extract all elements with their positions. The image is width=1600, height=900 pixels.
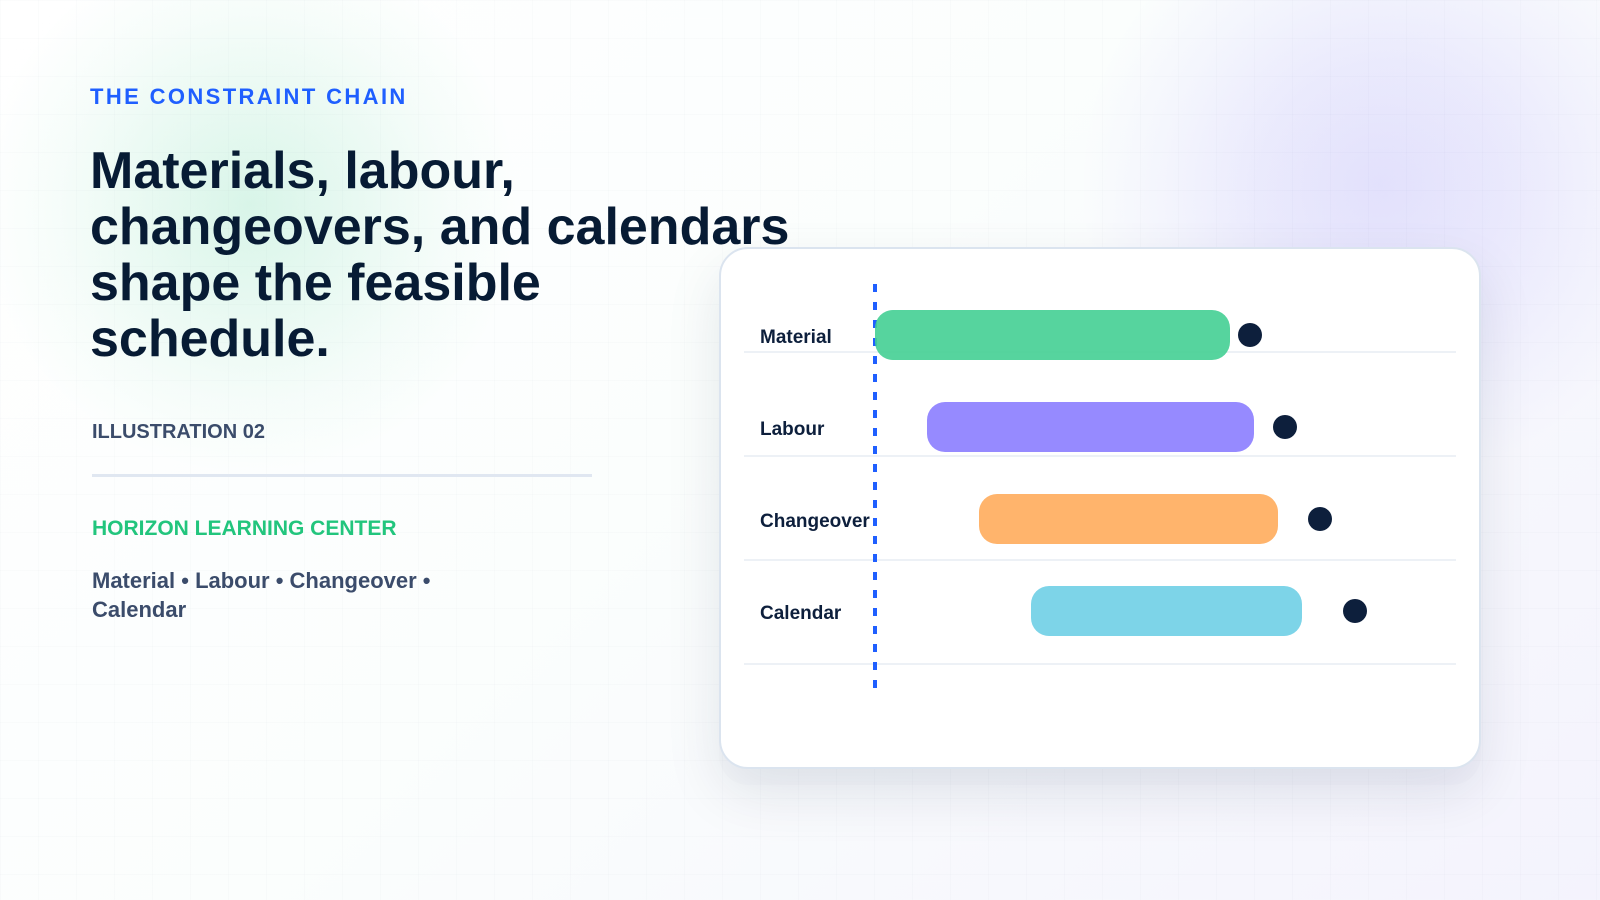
row: material <box>760 310 1262 360</box>
organisation name: HORIZON LEARNING CENTER <box>92 517 396 540</box>
eyebrow: the constraint chain: THE CONSTRAINT CHAIN <box>90 84 408 109</box>
constraint list <box>92 568 431 622</box>
illustration number: ILLUSTRATION 02 <box>92 421 265 443</box>
row: labour: Labour <box>760 419 824 440</box>
constraint list: Material • Labour • Changeover • <box>92 568 431 593</box>
title: Materials, labour, <box>90 142 515 200</box>
row: calendar <box>760 586 1367 636</box>
row: changeover <box>760 494 1332 544</box>
row: changeover: Changeover <box>760 511 870 532</box>
title: shape the feasible <box>90 254 541 312</box>
title <box>90 142 789 368</box>
constraint list: Calendar <box>92 597 186 622</box>
row: material: Material <box>760 327 832 348</box>
title: schedule. <box>90 310 330 368</box>
row: calendar: Calendar <box>760 603 841 624</box>
limit line <box>873 284 877 688</box>
title: changeovers, and calendars <box>90 198 789 256</box>
row: labour <box>760 402 1297 452</box>
panel: schedule chart card <box>719 247 1481 769</box>
